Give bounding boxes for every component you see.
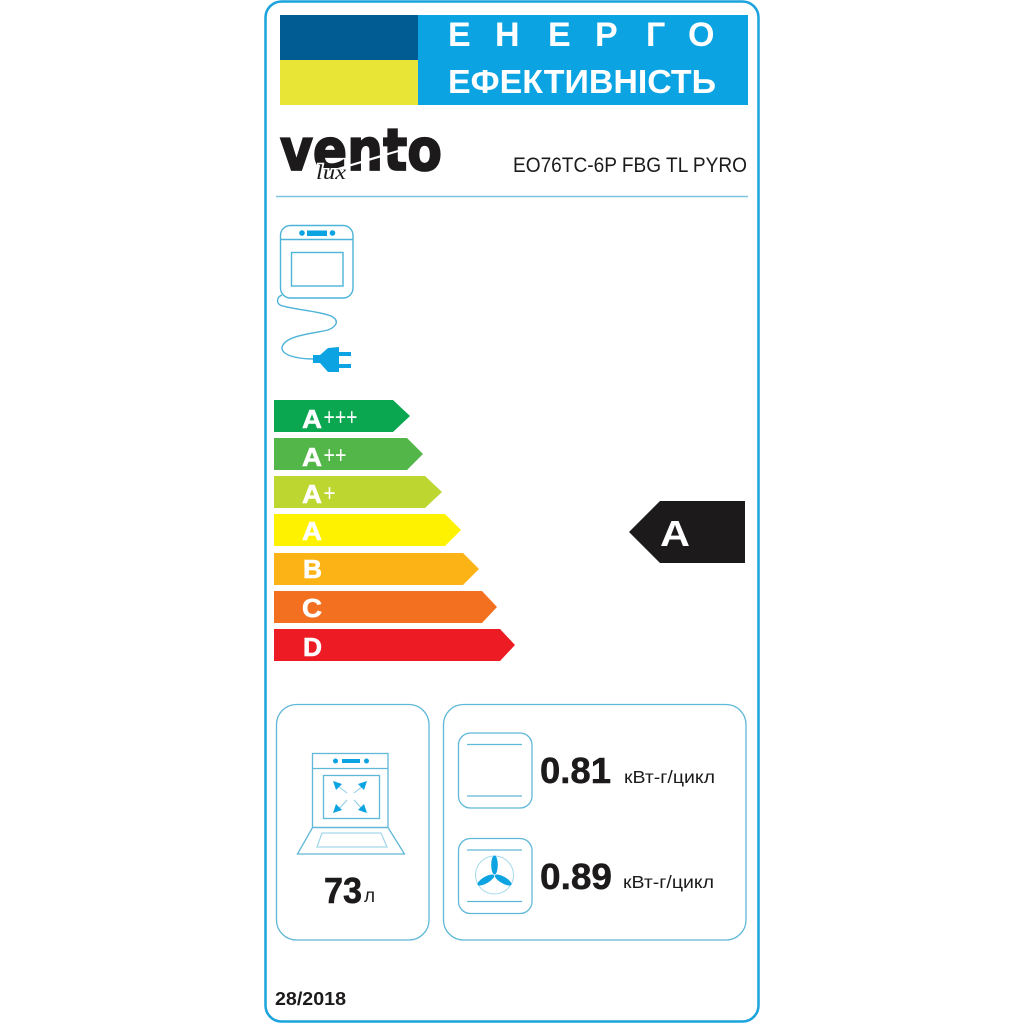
- capacity unit: л: [364, 886, 375, 907]
- bar C: C: [302, 593, 322, 623]
- model name: EO76TC-6P FBG TL PYRO: [513, 153, 747, 177]
- title line 1: Е: [448, 16, 471, 54]
- bar A+: A: [302, 479, 322, 509]
- rating arrow: A: [629, 501, 745, 563]
- bar B: [274, 553, 479, 585]
- unit: conventional: кВт-г/цикл: [624, 767, 715, 787]
- rating arrow: A: A: [660, 513, 690, 554]
- title line 1: Е: [548, 16, 571, 54]
- icon: fan heating: [458, 838, 532, 914]
- icon: oven volume: [298, 754, 404, 854]
- panel: energy consumption: [444, 704, 746, 940]
- title line 1: Р: [595, 16, 618, 54]
- bar A+++: A: [302, 404, 322, 434]
- bar A+: [274, 476, 442, 509]
- title line 1: [448, 16, 714, 54]
- bar A++: A: [302, 442, 322, 472]
- consumption value: conventional: 0.81: [540, 750, 611, 791]
- energy scale: [274, 400, 515, 662]
- title line 2: ЕФЕКТИВНІСТЬ: [448, 63, 716, 100]
- banner title panel: [418, 15, 748, 105]
- brand logo: vento: [280, 116, 442, 184]
- capacity value: 73: [324, 870, 362, 911]
- title line 1: Г: [646, 16, 665, 54]
- icon: electric oven with plug: [278, 226, 353, 372]
- consumption value: fan: 0.89: [540, 856, 612, 897]
- bar D: D: [303, 632, 322, 662]
- flag: blue stripe: [280, 15, 418, 60]
- bar A+++: +++: [324, 404, 358, 431]
- bar A: A: [302, 516, 322, 546]
- bar C: [274, 591, 497, 623]
- bar B: B: [303, 554, 322, 584]
- bar A++: ++: [324, 442, 346, 469]
- brand logo: lux: [316, 160, 347, 184]
- unit: fan: кВт-г/цикл: [623, 872, 714, 892]
- flag: yellow stripe: [280, 60, 418, 105]
- bar A++: [274, 438, 423, 472]
- title line 1: О: [688, 16, 714, 54]
- bar D: [274, 629, 515, 662]
- bar A+++: [274, 400, 410, 434]
- label frame: [266, 2, 758, 1022]
- title line 1: Н: [495, 16, 520, 54]
- panel: capacity: [276, 704, 429, 940]
- icon: conventional heating: [458, 733, 532, 808]
- bar A: [274, 514, 461, 546]
- header banner: [280, 15, 748, 105]
- regulation number: 28/2018: [275, 989, 346, 1009]
- bar A+: +: [324, 480, 336, 507]
